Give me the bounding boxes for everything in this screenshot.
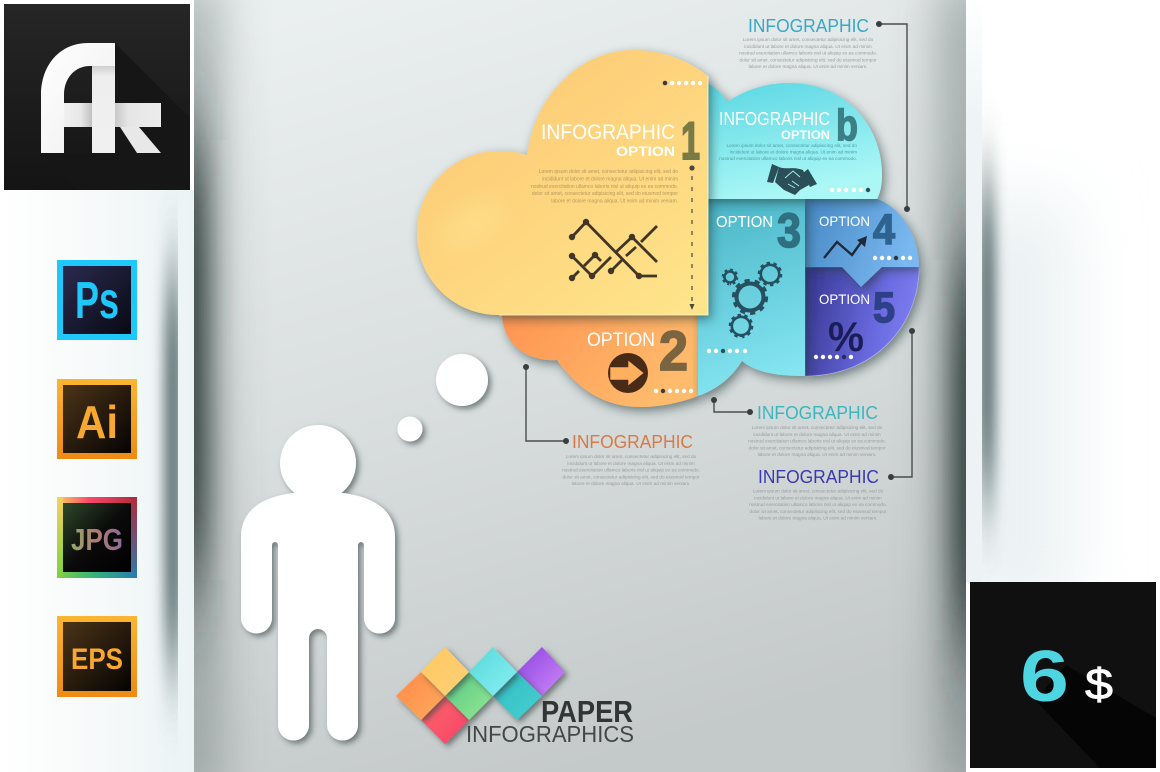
panel: left sidebar: [98, 190, 194, 772]
panel: option 1 yellow: nostrud exercitation ullamco laboris nisl ut aliquip ex ea commodo.: [531, 184, 678, 190]
callout: orange infographic: [523, 364, 700, 486]
callout: orange infographic: dolor sit amet, consectetur adipisicing elit, sed do eiusmod tempor: [562, 474, 700, 479]
panel: option 2 orange: OPTION: [587, 330, 655, 351]
panel: option 1 yellow: INFOGRAPHIC: [541, 121, 675, 144]
panel: centre paper background: [170, 0, 990, 772]
callout: top infographic: dolor sit amet, consectetur adipisicing elit, sed do eiusmod tempor: [739, 57, 877, 62]
callout: orange infographic: labore et dolore magna aliqua. Ut enim ad minim veniam.: [572, 481, 690, 486]
panel: option 2 orange: [502, 315, 698, 407]
panel: option 4 blue: [805, 199, 919, 287]
panel: option b cyan: incididunt ut labore et dolore magna aliqua. Ut enim ad minim: [730, 150, 857, 154]
icon: JPG: [57, 497, 137, 578]
callout: blue infographic: nostrud exercitation ullamco laboris nisl ut aliquip ex ea commodo.: [749, 502, 887, 507]
panel: option 2 orange: 2: [659, 319, 688, 382]
panel: option 1 yellow: 1: [681, 112, 700, 171]
icon: JPG: JPG: [71, 522, 123, 557]
panel: option 4 blue: OPTION: [819, 213, 870, 229]
callout: blue infographic: [749, 328, 915, 521]
panel: option 5 purple: %: [828, 313, 864, 360]
callout: blue infographic: labore et dolore magna aliqua. Ut enim ad minim veniam.: [759, 516, 877, 521]
callout: teal infographic: [711, 397, 886, 457]
panel: option 3 teal: OPTION: [716, 214, 773, 231]
logo wordmark: PAPER: [541, 694, 633, 729]
panel: option b cyan: nostrud exercitation ullamco laboris nisl ut aliquip ex ea commodo.: [719, 156, 857, 161]
logo wordmark: [466, 694, 634, 747]
callout: orange infographic: INFOGRAPHIC: [572, 432, 693, 452]
panel: option b cyan: Lorem ipsum dolor sit amet, consectetur adipisicing elit, sed do: [726, 143, 857, 148]
callout: teal infographic: incididunt ut labore et dolore magna aliqua. Ut enim ad minim: [753, 432, 881, 437]
callout: blue infographic: Lorem ipsum dolor sit amet, consectetur adipisicing elit, sed do: [753, 488, 884, 494]
price tile: 6: [1020, 637, 1069, 717]
logo wordmark: INFOGRAPHICS: [466, 721, 634, 747]
panel: option 4 blue: 4: [873, 206, 895, 254]
callout: blue infographic: dolor sit amet, consectetur adipisicing elit, sed do eiusmod tempor: [749, 509, 887, 514]
thought cloud diagram: [417, 50, 919, 407]
panel: option 3 teal: [698, 199, 805, 396]
callout: teal infographic: labore et dolore magna aliqua. Ut enim ad minim veniam.: [758, 452, 876, 457]
callout: teal infographic: dolor sit amet, consectetur adipisicing elit, sed do eiusmod tempor: [748, 445, 886, 450]
icon: EPS: [57, 616, 137, 697]
price tile: [970, 582, 1156, 768]
callout: teal infographic: nostrud exercitation ullamco laboris nisl ut aliquip ex ea commodo.: [748, 439, 886, 444]
icon: handshake: [767, 164, 817, 195]
panel: option 1 yellow: Lorem ipsum dolor sit amet, consectetur adipisicing elit, sed do: [539, 169, 678, 175]
icon: Photoshop: [57, 260, 137, 340]
callout: top infographic: nostrud exercitation ullamco laboris nisl ut aliquip ex ea commodo.: [739, 51, 877, 56]
panel: option 5 purple: [805, 267, 919, 376]
callout: blue infographic: incididunt ut labore et dolore magna aliqua. Ut enim ad minim: [754, 495, 882, 500]
callout: top infographic: Lorem ipsum dolor sit amet, consectetur adipisicing elit, sed do: [743, 37, 874, 42]
callout: orange infographic: Lorem ipsum dolor sit amet, consectetur adipisicing elit, sed do: [566, 454, 697, 459]
panel: option b cyan: OPTION: [781, 128, 830, 142]
panel: option 3 teal: 3: [777, 205, 801, 258]
logo: AK brand tile: [4, 4, 190, 190]
callout: top infographic: [739, 16, 910, 212]
figure: paper person: [241, 425, 395, 740]
icon: line chart: [569, 219, 657, 281]
panel: option 1 yellow: incididunt ut labore et dolore magna aliqua. Ut enim ad minim: [542, 176, 678, 182]
icon: gears: [723, 263, 781, 337]
callout: top infographic: incididunt ut labore et dolore magna aliqua. Ut enim ad minim: [744, 44, 872, 49]
thought bubble: small: [398, 416, 422, 442]
panel: option 5 purple: OPTION: [819, 291, 870, 307]
price tile: $: [1085, 660, 1113, 709]
panel: right sidebar: [966, 56, 1078, 582]
panel: option 1 yellow: OPTION: [616, 143, 675, 159]
icon: Illustrator: Ai: [76, 396, 118, 448]
panel: option 1 yellow: [417, 50, 708, 315]
callout: top infographic: INFOGRAPHIC: [748, 16, 869, 36]
icon: EPS: EPS: [71, 643, 123, 676]
callout: orange infographic: incididunt ut labore et dolore magna aliqua. Ut enim ad minim: [567, 461, 695, 466]
thought bubble: large: [436, 354, 488, 406]
panel: option b cyan: [700, 80, 882, 199]
callout: blue infographic: INFOGRAPHIC: [758, 467, 879, 487]
panel: option b cyan: b: [836, 101, 858, 150]
icon: dashed arrow: [689, 165, 695, 310]
panel: option 1 yellow: labore et dolore magna aliqua. Ut enim ad minim veniam.: [551, 198, 678, 204]
callout: orange infographic: nostrud exercitation ullamco laboris nisl ut aliquip ex ea commodo.: [562, 468, 700, 473]
panel: option b cyan: INFOGRAPHIC: [719, 109, 830, 129]
icon: Illustrator: [57, 379, 137, 459]
icon: Photoshop: Ps: [75, 272, 119, 330]
panel: option 1 yellow: dolor sit amet, consectetur adipisicing elit, sed do eiusmod tempor: [532, 191, 678, 197]
callout: teal infographic: INFOGRAPHIC: [757, 403, 878, 423]
callout: top infographic: labore et dolore magna aliqua. Ut enim ad minim veniam.: [749, 64, 867, 69]
callout: teal infographic: Lorem ipsum dolor sit amet, consectetur adipisicing elit, sed do: [752, 425, 883, 430]
panel: option 5 purple: 5: [873, 284, 895, 332]
logo: paper infographics diamonds: [396, 647, 565, 744]
